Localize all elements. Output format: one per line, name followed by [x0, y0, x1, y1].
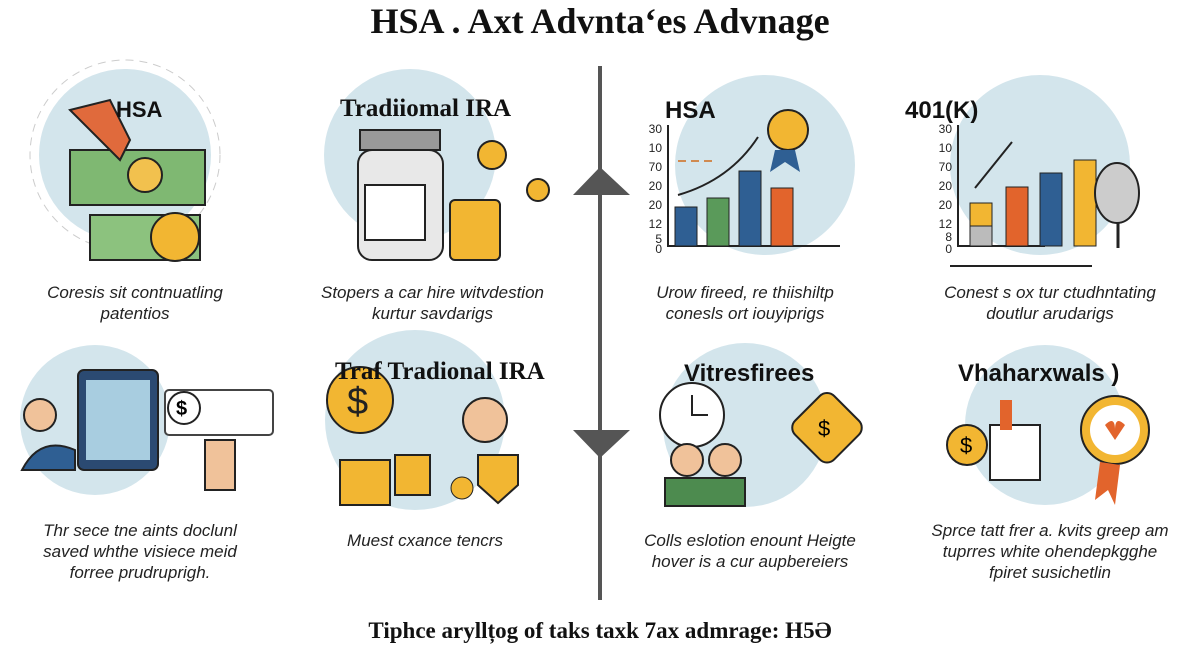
caption 4: doutlur arudarigs — [986, 304, 1114, 323]
arrow: down — [573, 430, 630, 458]
heading: row2 IRA: Traf Tradional IRA — [335, 358, 545, 385]
caption 8 — [931, 521, 1169, 582]
panel: tablet person — [20, 345, 273, 495]
caption 2: kurtur savdarigs — [372, 304, 493, 323]
panel: 401k bar chart: 10 — [939, 141, 952, 155]
caption 8: Sprce tatt frer a. kvits greep am — [931, 521, 1169, 540]
heading: HSA: HSA — [116, 97, 162, 122]
panel: clock and people — [660, 343, 866, 507]
panel: 401k bar chart: 70 — [939, 160, 952, 174]
panel: HSA bar chart: 20 — [649, 198, 662, 212]
caption 8: fpiret susichetlin — [989, 563, 1111, 582]
caption 7 — [644, 531, 856, 571]
panel: 401k bar chart — [939, 75, 1139, 266]
panel: HSA bar chart — [649, 75, 855, 256]
caption 5 — [43, 521, 238, 582]
caption 3 — [656, 283, 834, 323]
caption 4: Conest s ox tur ctudhntating — [944, 283, 1156, 302]
panel: HSA bar chart: 30 — [649, 122, 662, 136]
caption 4 — [944, 283, 1156, 323]
heading: 401k: 401(K) — [905, 97, 978, 124]
title: HSA . Axt Advntaʻes Advnage — [370, 1, 830, 41]
panel: HSA bar chart: 70 — [649, 160, 662, 174]
panel: 401k bar chart: 8 — [945, 230, 952, 244]
panel: coins and person — [325, 330, 518, 510]
panel: clock and people: $ — [818, 416, 830, 441]
panel: coins and person: $ — [347, 381, 368, 423]
caption 1 — [47, 283, 223, 323]
caption 2 — [321, 283, 544, 323]
caption 3: Urow fireed, re thiishiltp — [656, 283, 834, 302]
caption 7: Colls eslotion enount Heigte — [644, 531, 856, 550]
panel: health icon: $ — [960, 433, 972, 458]
caption 7: hover is a cur aupbereiers — [652, 552, 848, 571]
heading: Vitresfirees: Vitresfirees — [684, 360, 814, 387]
panel: IRA jar — [324, 69, 549, 260]
heading: Vhaharxwals: Vhaharxwals ) — [958, 360, 1119, 387]
panel: 401k bar chart: 20 — [939, 179, 952, 193]
divider — [598, 66, 602, 600]
arrow: up — [573, 167, 630, 195]
caption 2: Stopers a car hire witvdestion — [321, 283, 544, 302]
panel: 401k bar chart: 20 — [939, 198, 952, 212]
caption 1: patentios — [100, 304, 170, 323]
heading: HSA chart: HSA — [665, 97, 716, 124]
footer: Tiphce aryllțog of taks taxk 7ax admrage: H5Ə — [368, 618, 832, 643]
panel: HSA bar chart: 0 — [655, 242, 662, 256]
panel: 401k bar chart: 12 — [939, 217, 952, 231]
panel: HSA bar chart: 12 — [649, 217, 662, 231]
panel: tablet person: $ — [176, 398, 187, 420]
panel: HSA bar chart: 5 — [655, 232, 662, 246]
caption 1: Coresis sit contnuatling — [47, 283, 223, 302]
caption 5: forree prudruprigh. — [70, 563, 210, 582]
panel: 401k bar chart: 0 — [945, 242, 952, 256]
caption 6: Muest cxance tencrs — [347, 531, 503, 550]
panel: health icon — [947, 345, 1149, 505]
panel: 401k bar chart: 30 — [939, 122, 952, 136]
panel: HSA bar chart: 10 — [649, 141, 662, 155]
caption 8: tuprres white ohendepkgghe — [943, 542, 1157, 561]
heading: Traditional IRA: Tradiiomal IRA — [340, 95, 511, 122]
panel: HSA cash icon — [30, 60, 220, 261]
panel: HSA bar chart: 20 — [649, 179, 662, 193]
caption 5: Thr sece tne aints doclunl — [43, 521, 237, 540]
caption 3: conesls ort iouyiprigs — [666, 304, 824, 323]
caption 5: saved whthe visiece meid — [43, 542, 237, 561]
